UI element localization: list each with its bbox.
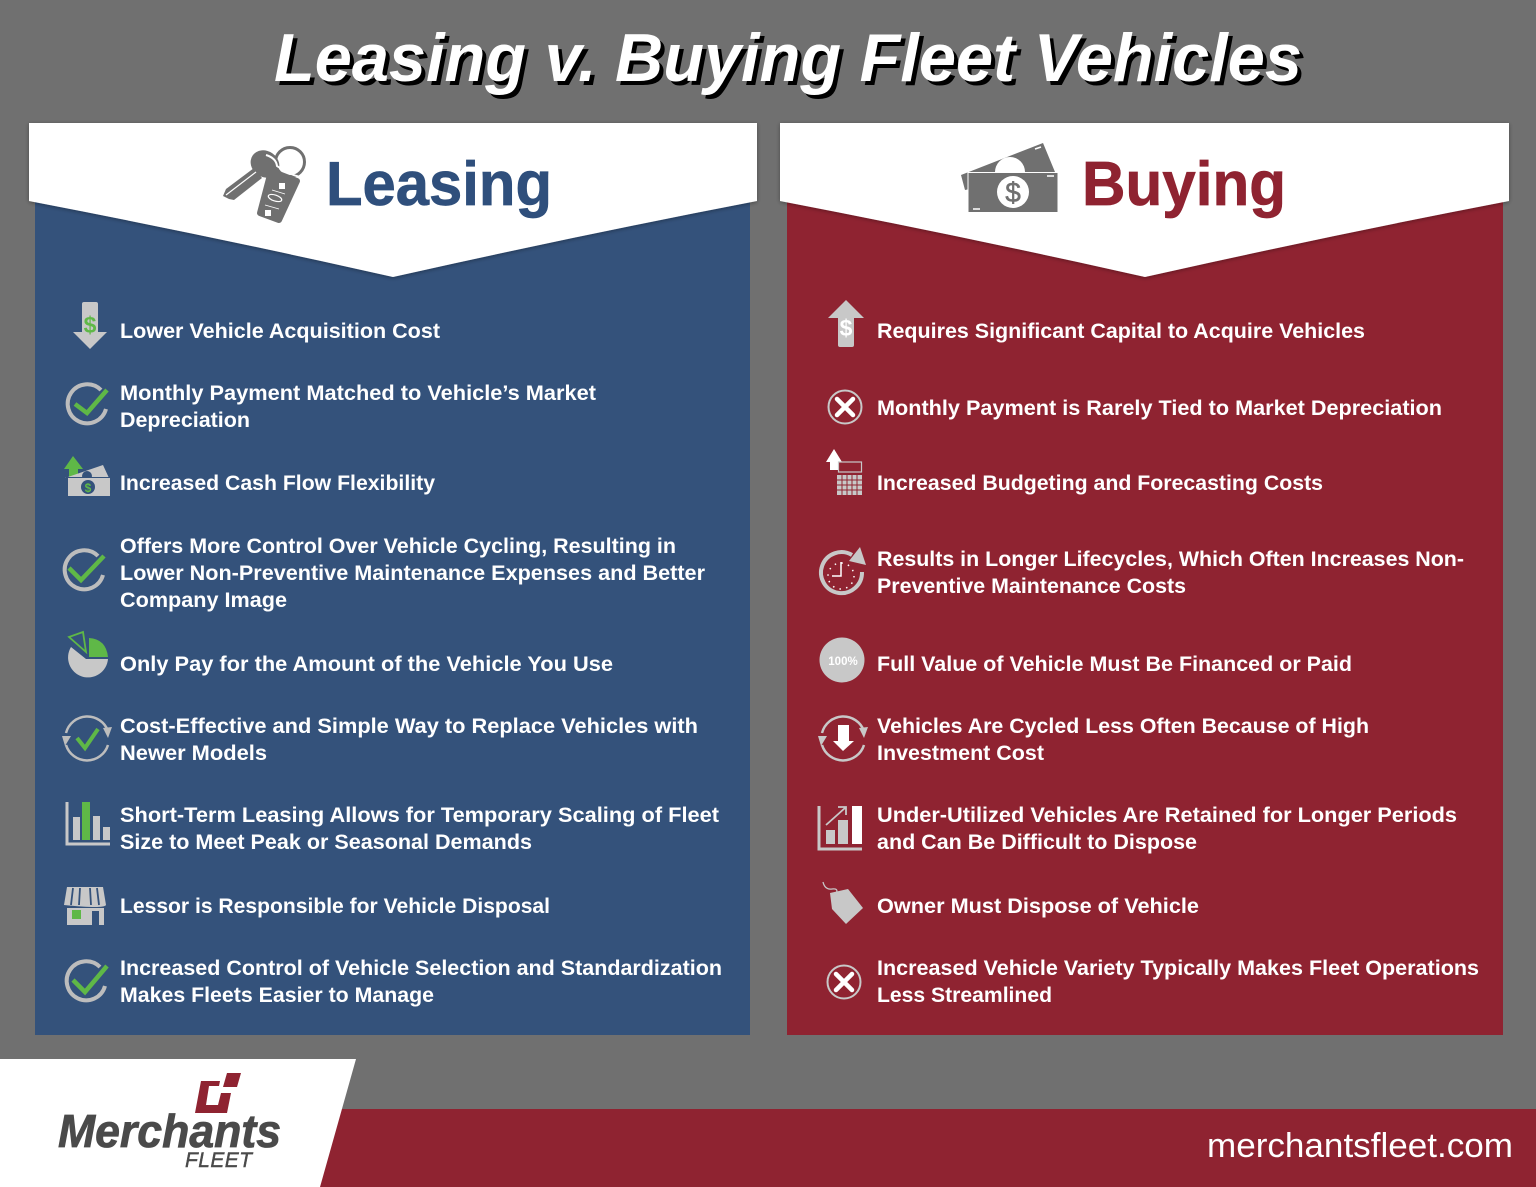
icon: cash bills	[961, 143, 1058, 212]
icon: cash with arrow: $	[85, 481, 92, 495]
buying header	[780, 123, 1509, 277]
leasing header	[29, 123, 757, 277]
text: capital: Requires Significant Capital to Acquire Vehicles	[877, 319, 1365, 343]
icon: clock	[821, 547, 866, 593]
heading: buying: Buying	[1082, 150, 1286, 219]
text: vehicle cycling: Company Image	[120, 588, 287, 612]
logo fleet: FLEET	[185, 1149, 254, 1172]
icon: price tag	[823, 882, 863, 924]
text: cost effective: Cost-Effective and Simple Way to Replace Vehicles with	[120, 714, 698, 738]
icon: down arrow dollar: $	[84, 312, 97, 338]
icon: x circle 2	[828, 966, 860, 998]
text: rarely tied: Monthly Payment is Rarely Tied to Market Depreciation	[877, 396, 1442, 420]
panel: leasing	[29, 123, 757, 1035]
icon: pie chart	[68, 632, 108, 677]
text: cost effective: Newer Models	[120, 741, 267, 765]
text: only pay: Only Pay for the Amount of the Vehicle You Use	[120, 652, 613, 676]
panel: buying	[780, 123, 1509, 1035]
text: cycled less	[877, 714, 1369, 765]
icon: x circle 1	[828, 390, 862, 424]
text: cycled less: Investment Cost	[877, 741, 1044, 765]
title: Leasing v. Buying Fleet Vehicles	[274, 20, 1302, 96]
icon: cycle check	[62, 716, 112, 760]
icon: cash bills: $	[1005, 177, 1021, 208]
icon: rising bars	[819, 806, 862, 849]
icon: check circle 3	[67, 961, 107, 1000]
text: cycled less: Vehicles Are Cycled Less Often Because of High	[877, 714, 1369, 738]
text: cash flow: Increased Cash Flow Flexibility	[120, 471, 435, 495]
text: full value: Full Value of Vehicle Must Be Financed or Paid	[877, 652, 1352, 676]
text: short term	[120, 803, 719, 854]
icon: down arrow dollar	[73, 302, 107, 349]
text: under utilized: and Can Be Difficult to Dispose	[877, 830, 1197, 854]
text: monthly payment: Depreciation	[120, 408, 250, 432]
website url: merchantsfleet.com	[1207, 1127, 1513, 1165]
text: under utilized: Under-Utilized Vehicles Are Retained for Longer Periods	[877, 803, 1457, 827]
text: lifecycles: Results in Longer Lifecycles, Which Often Increases Non-	[877, 547, 1464, 571]
icon: cash with arrow	[64, 456, 110, 496]
text: vehicle cycling	[120, 534, 706, 612]
icon: check circle 1	[68, 384, 107, 423]
text: variety: Less Streamlined	[877, 983, 1052, 1007]
text: owner: Owner Must Dispose of Vehicle	[877, 894, 1199, 918]
title: Leasing v. Buying Fleet Vehicles	[278, 24, 1306, 100]
icon: bar chart	[67, 802, 110, 844]
text: monthly payment	[120, 381, 596, 432]
text: selection: Makes Fleets Easier to Manage	[120, 983, 434, 1007]
text: lifecycles: Preventive Maintenance Costs	[877, 574, 1186, 598]
text: variety: Increased Vehicle Variety Typically Makes Fleet Operations	[877, 956, 1479, 980]
heading: leasing: Leasing	[326, 150, 552, 219]
icon: 100 percent	[820, 638, 864, 682]
text: under utilized	[877, 803, 1457, 854]
text: lifecycles	[877, 547, 1464, 598]
text: short term: Short-Term Leasing Allows for Temporary Scaling of Fleet	[120, 803, 719, 827]
icon: storefront	[64, 887, 106, 925]
logo mark	[195, 1073, 241, 1113]
text: disposal: Lessor is Responsible for Vehicle Disposal	[120, 894, 550, 918]
icon: 100 percent: 100%	[828, 656, 858, 668]
icon: calculator arrow	[826, 449, 862, 495]
text: lower cost: Lower Vehicle Acquisition Cost	[120, 319, 440, 343]
text: selection	[120, 956, 722, 1007]
logo wordmark: Merchants	[58, 1105, 281, 1157]
icon: cycle down arrow	[818, 716, 868, 760]
text: vehicle cycling: Lower Non-Preventive Maintenance Expenses and Better	[120, 561, 706, 585]
text: short term: Size to Meet Peak or Seasonal Demands	[120, 830, 532, 854]
icon: check circle 2	[65, 550, 104, 589]
logo panel	[0, 1059, 356, 1187]
text: variety	[877, 956, 1479, 1007]
text: monthly payment: Monthly Payment Matched to Vehicle’s Market	[120, 381, 596, 405]
text: selection: Increased Control of Vehicle Selection and Standardization	[120, 956, 722, 980]
icon: up arrow dollar	[828, 300, 864, 347]
text: vehicle cycling: Offers More Control Over Vehicle Cycling, Resulting in	[120, 534, 676, 558]
text: budgeting: Increased Budgeting and Forecasting Costs	[877, 471, 1323, 495]
icon: up arrow dollar: $	[840, 315, 853, 341]
icon: car keys	[223, 145, 304, 220]
footer band	[300, 1109, 1536, 1187]
text: cost effective	[120, 714, 698, 765]
